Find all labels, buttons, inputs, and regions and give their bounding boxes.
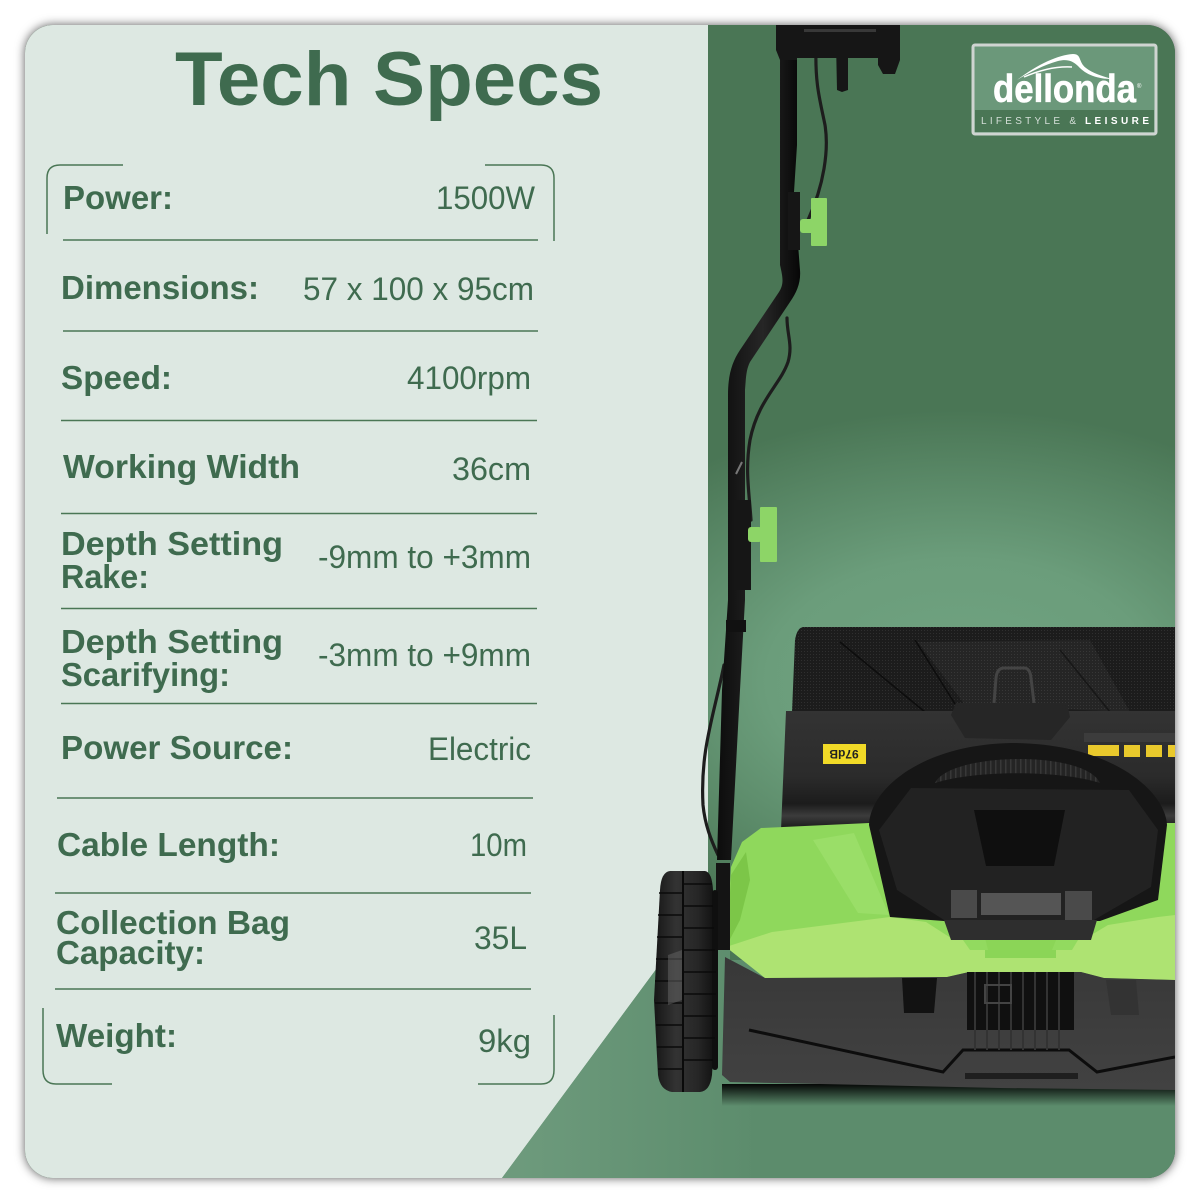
spec: depth setting scarifying: Scarifying: <box>61 656 230 693</box>
lower body <box>722 957 1175 1090</box>
spec: dimensions: Dimensions: <box>61 269 259 306</box>
noise badge: 97dB <box>829 747 859 761</box>
bag handle wire <box>994 668 1034 703</box>
spec: weight: 9kg <box>478 1023 531 1059</box>
lower diagonal accent <box>502 950 1175 1178</box>
spec: power source: Power Source: <box>61 729 293 766</box>
green deck <box>726 823 1175 980</box>
icon: cables <box>703 48 826 855</box>
spec: cable length <box>57 826 527 863</box>
hood <box>869 743 1167 940</box>
warning labels <box>1084 733 1175 757</box>
panel: light spec panel <box>25 25 708 1178</box>
spec: working width: 36cm <box>452 451 531 487</box>
product photo: scarifier <box>654 25 1182 1106</box>
spec: speed <box>61 359 531 396</box>
spec: power source: Electric <box>428 731 531 767</box>
spec: dimensions <box>61 269 534 307</box>
spec: depth setting scarifying: -3mm to +9mm <box>318 637 531 673</box>
spec: weight: Weight: <box>56 1017 177 1054</box>
spec: collection bag capacity <box>56 904 527 971</box>
rear housing <box>781 711 1175 830</box>
spec: dimensions: 57 x 100 x 95cm <box>303 271 534 307</box>
spec: collection bag capacity: Capacity: <box>56 934 205 971</box>
spec: depth setting scarifying <box>61 623 531 693</box>
icon: green knob upper <box>800 198 827 246</box>
wheel <box>654 871 718 1092</box>
spec: working width: Working Width <box>63 448 300 485</box>
logo: dellonda <box>973 45 1156 134</box>
spec: working width <box>63 448 531 487</box>
spec: cable length: 10m <box>470 827 527 863</box>
spec: weight <box>56 1017 531 1059</box>
spec: speed: 4100rpm <box>407 360 531 396</box>
icon: handle head <box>776 25 900 92</box>
title: Tech Specs <box>175 37 603 122</box>
spec: depth setting scarifying: Depth Setting <box>61 623 283 660</box>
icon: handle tube <box>717 45 800 860</box>
logo: dellonda: LIFESTYLE & <box>981 116 1076 127</box>
ground shadow <box>722 1084 1182 1106</box>
spec: power: Power: <box>63 179 173 216</box>
spec: power: 1500W <box>436 180 536 216</box>
side vents <box>902 978 1139 1015</box>
spec: speed: Speed: <box>61 359 172 396</box>
spec: collection bag capacity: 35L <box>474 920 527 956</box>
icon: green knob lower <box>748 507 777 562</box>
front vent <box>967 972 1074 1050</box>
bag: mesh collector <box>792 627 1175 712</box>
logo: dellonda: ® <box>1137 83 1142 90</box>
noise badge <box>823 744 866 764</box>
logo: dellonda: dellonda <box>993 68 1136 111</box>
spec: cable length: Cable Length: <box>57 826 280 863</box>
logo: dellonda: LEISURE <box>1085 116 1149 127</box>
row dividers <box>55 240 538 989</box>
spec: depth setting rake: Rake: <box>61 558 149 595</box>
axle bracket <box>716 863 730 950</box>
spec: depth setting rake: -9mm to +3mm <box>318 539 531 575</box>
bag latch <box>951 703 1070 740</box>
spec: depth setting rake <box>61 525 531 595</box>
spec: collection bag capacity: Collection Bag <box>56 904 290 941</box>
spec: power source <box>61 729 531 767</box>
spec: power <box>63 179 536 216</box>
spec: depth setting rake: Depth Setting <box>61 525 283 562</box>
spec list frame corners <box>43 165 554 1084</box>
